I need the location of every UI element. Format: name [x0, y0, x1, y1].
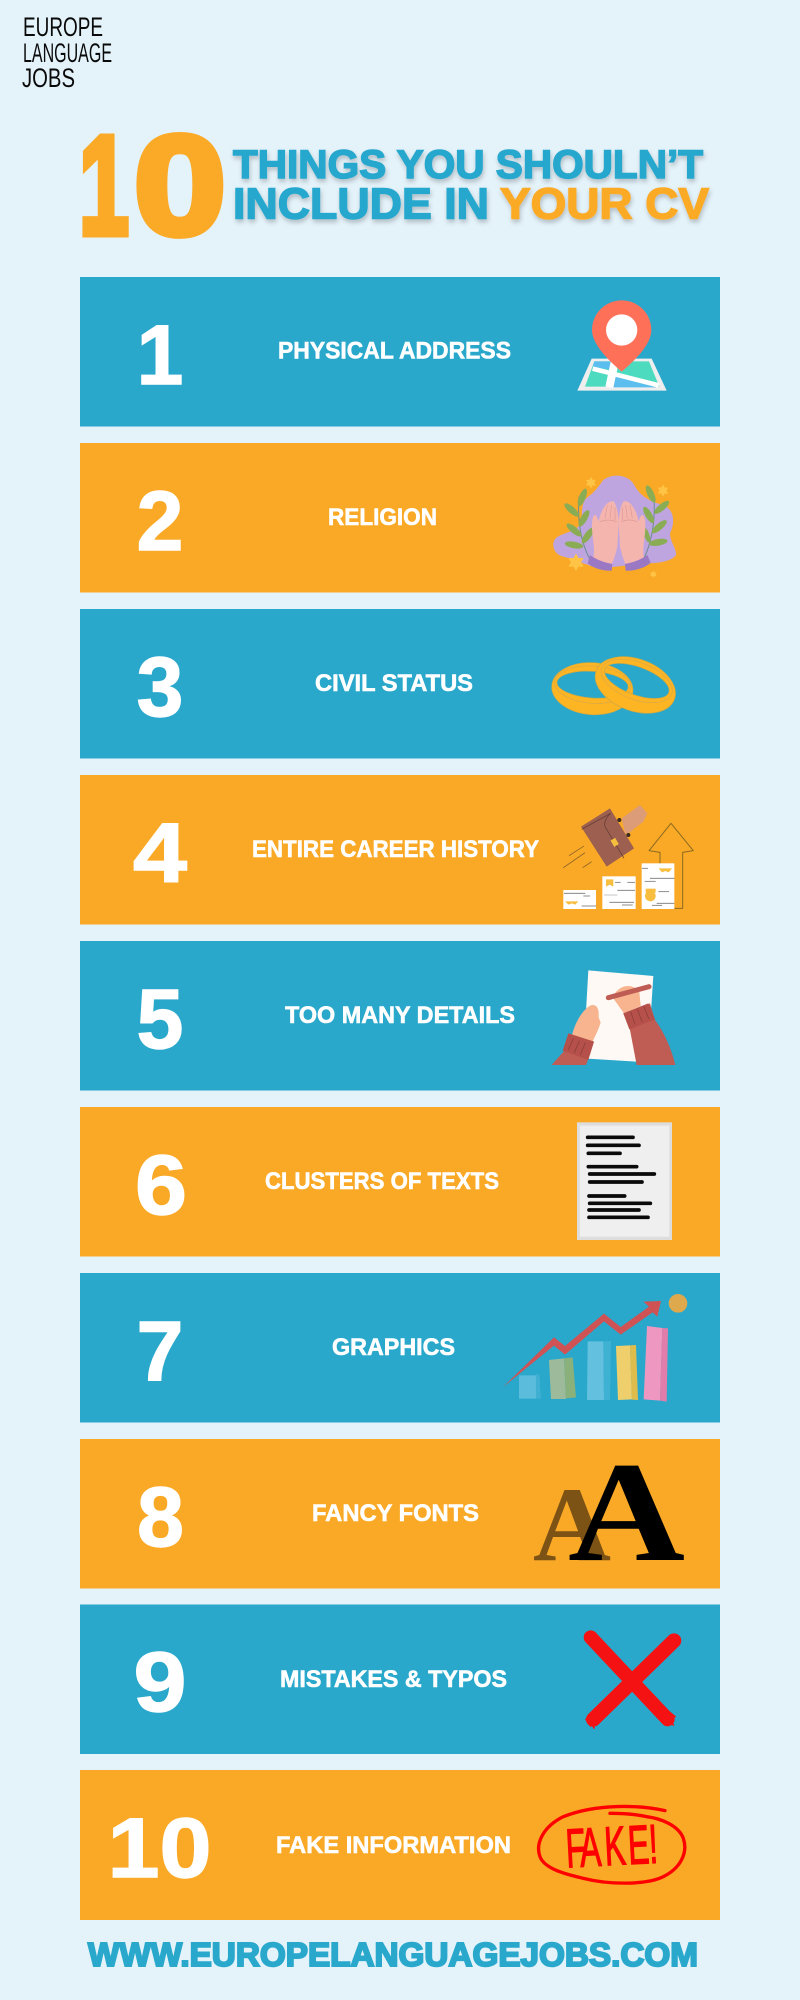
- number 1: 1: [137, 308, 183, 402]
- big number 10: [79, 106, 226, 264]
- label: ENTIRE CAREER HISTORY: [252, 836, 539, 863]
- icon: serif letters: [533, 1433, 685, 1591]
- label: CLUSTERS OF TEXTS: [265, 1168, 499, 1195]
- label: FANCY FONTS: [312, 1500, 479, 1527]
- icon: fake stamp: [539, 1806, 685, 1883]
- number 3: 3: [137, 640, 183, 734]
- label: FAKE INFORMATION: [276, 1832, 511, 1859]
- panel 9: mistakes and typos: [80, 1604, 720, 1754]
- panel 7: graphics: [80, 1273, 720, 1422]
- label: CIVIL STATUS: [315, 670, 473, 697]
- icon: red cross: [586, 1637, 675, 1728]
- logo: Europe Language Jobs: EUROPE: [23, 12, 103, 42]
- icon: fake stamp: FAKE!: [564, 1813, 659, 1880]
- panel 10: fake information: [80, 1770, 720, 1920]
- label: RELIGION: [328, 504, 437, 531]
- label: MISTAKES & TYPOS: [280, 1666, 507, 1693]
- number 9: 9: [134, 1635, 186, 1729]
- title text: THINGS YOU SHOULN’T: [233, 143, 703, 187]
- label: TOO MANY DETAILS: [285, 1002, 515, 1029]
- icon: praying hands: [553, 476, 676, 578]
- number 4: 4: [133, 806, 187, 900]
- panel 6: clusters of texts: [80, 1107, 720, 1256]
- logo: Europe Language Jobs: JOBS: [22, 63, 75, 93]
- title text: [233, 143, 710, 228]
- title text: INCLUDE IN: [233, 180, 489, 228]
- panel 2: religion: [80, 443, 720, 592]
- website footer: WWW.EUROPELANGUAGEJOBS.COM: [88, 1936, 698, 1973]
- icon: wedding rings: [550, 646, 683, 724]
- panel 4: entire career history: [80, 775, 720, 924]
- panel 3: civil status: [80, 609, 720, 758]
- title: [79, 106, 710, 264]
- icon: hands writing on paper: [552, 970, 675, 1065]
- panel 8: fancy fonts: [80, 1433, 720, 1591]
- panel 5: too many details: [80, 941, 720, 1090]
- icon: map pin: [577, 300, 667, 391]
- number 8: 8: [137, 1470, 184, 1564]
- number 6: 6: [135, 1138, 187, 1232]
- big number 10: 0: [134, 106, 226, 264]
- icon: briefcase and documents: [563, 805, 693, 909]
- icon: bar chart with arrow: [503, 1294, 687, 1402]
- number 5: 5: [137, 972, 183, 1066]
- panel 1: physical address: [80, 277, 720, 426]
- number 10: 10: [108, 1801, 212, 1895]
- label: GRAPHICS: [332, 1334, 455, 1361]
- big number 10: 1: [79, 106, 129, 264]
- title text: YOUR CV: [500, 180, 710, 228]
- number 7: 7: [137, 1304, 183, 1398]
- label: PHYSICAL ADDRESS: [278, 338, 511, 365]
- icon: text document: [577, 1122, 672, 1240]
- number 2: 2: [137, 474, 183, 568]
- logo: Europe Language Jobs: LANGUAGE: [23, 38, 112, 68]
- icon: serif letters: A: [568, 1433, 685, 1591]
- logo: Europe Language Jobs: [22, 12, 112, 93]
- icon: serif letters: A: [533, 1466, 611, 1583]
